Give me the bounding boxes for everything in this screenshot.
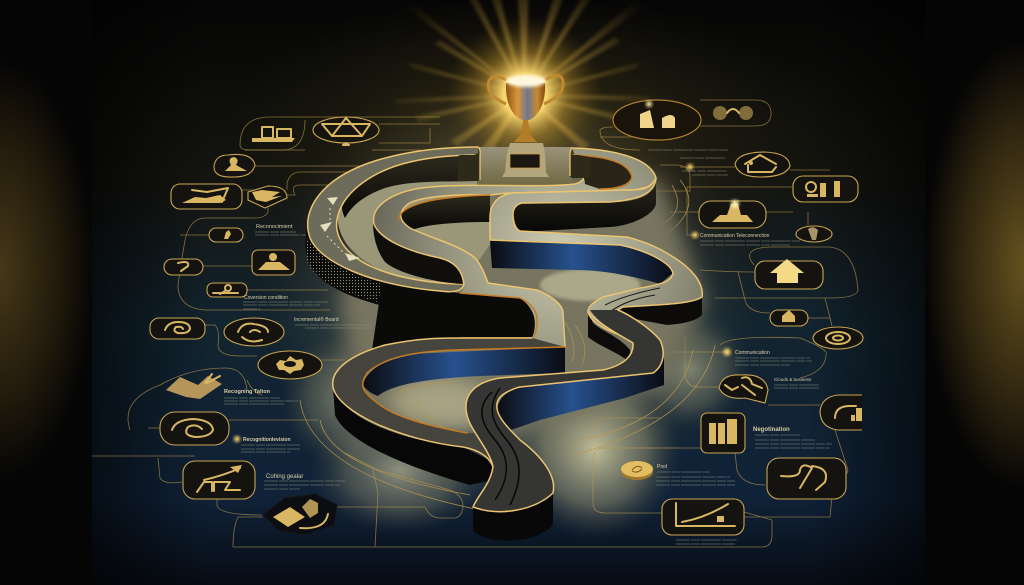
icon: swirl tile xyxy=(767,458,846,499)
icon: lit ellipse xyxy=(613,100,701,140)
label: Reconocimient: Reconocimient xyxy=(256,224,293,230)
trophy stem xyxy=(514,120,537,142)
icon: person tile xyxy=(252,250,295,275)
label: Reconocimient xyxy=(255,224,306,235)
label: Clouds and business xyxy=(774,377,820,388)
label: Recognitionlevision: Recognitionlevision xyxy=(243,437,291,443)
icon: spiral rounded tile xyxy=(150,318,205,339)
blue wall: left centre xyxy=(363,347,565,396)
crescent inner dark wall xyxy=(342,155,478,218)
road: lower dark surface xyxy=(466,310,663,512)
icon: gold mound xyxy=(248,186,287,208)
label: Pool: Pool xyxy=(657,464,667,470)
recess wall: interior near right bend xyxy=(372,293,537,350)
icon: boxes panel xyxy=(240,120,305,150)
icon: gear ellipse xyxy=(258,351,322,379)
label: Communication teleconnection: Communication Teleconnection xyxy=(700,233,770,239)
icon: handshake xyxy=(719,375,768,403)
label: Recogning Tatton: Recogning Talton xyxy=(224,389,271,395)
wall: S ribbon left bulge xyxy=(373,222,463,284)
gold edges: looping ribbon xyxy=(490,178,702,335)
trophy cup xyxy=(506,83,545,120)
icon: chart magnifier tile xyxy=(793,176,858,202)
trophy rim xyxy=(506,75,546,87)
road: lower left S surface xyxy=(333,338,565,467)
trophy rays xyxy=(395,0,652,155)
icon: graph tile xyxy=(662,499,744,535)
icon: house pill xyxy=(770,310,808,326)
label: top right text two xyxy=(682,164,728,175)
label: Negotiation: Negotination xyxy=(753,427,790,433)
label: Cohing gealar xyxy=(264,474,345,489)
central olive ground xyxy=(340,147,704,440)
wall: under left of right ribbon xyxy=(588,312,632,365)
connector lines network xyxy=(92,117,858,547)
icon: target ellipse xyxy=(813,327,863,349)
label: Communication teleconnection xyxy=(692,232,800,245)
trophy handles xyxy=(488,75,563,104)
orange inner edge: lower left S xyxy=(363,347,565,433)
icon: spiral tile xyxy=(160,412,229,445)
icon: gold boxes hexagon xyxy=(263,494,337,535)
label: Conversion condition: Coversion condition xyxy=(244,295,288,301)
gold edges: lower road xyxy=(466,310,663,512)
wall: lower S left xyxy=(333,387,493,485)
trophy plaque xyxy=(510,154,540,168)
right edge band xyxy=(925,0,1024,585)
icon: chart tile xyxy=(171,184,242,209)
label: Incremental board: Incremental® Board xyxy=(294,316,339,323)
road stripes on bend xyxy=(605,288,660,312)
icon: question ellipse xyxy=(164,259,203,275)
icon: gears pill xyxy=(700,100,771,126)
icon: pill xyxy=(209,228,243,242)
icon: arrow tile xyxy=(755,259,823,289)
inner orange edge of top right wall xyxy=(398,155,632,338)
blue wall: upper xyxy=(490,240,673,284)
wall: lower road end cap xyxy=(473,493,553,541)
icon: magnifier pill xyxy=(207,283,247,297)
crescent interior ground xyxy=(338,155,500,283)
trophy glow xyxy=(447,17,603,173)
label: bottom text xyxy=(676,540,738,544)
icon: bulb cloud xyxy=(796,226,832,242)
road stripes xyxy=(482,388,519,505)
wall end caps beside trophy xyxy=(458,147,590,181)
crescent road surface xyxy=(308,147,480,292)
label: Negotiation xyxy=(753,427,832,448)
label: Pool xyxy=(656,464,735,485)
dotted outer wall xyxy=(306,238,382,302)
wall: top right bend xyxy=(572,155,632,189)
icon: roof rounded xyxy=(735,152,790,177)
label: Cohing gealar: Cohing gealar xyxy=(266,474,303,480)
icon: triangle ellipse xyxy=(313,117,379,145)
ground gold contour rings xyxy=(300,180,715,510)
icon: person blob xyxy=(214,154,255,177)
trophy xyxy=(488,75,563,177)
wall: mid right under ribbon xyxy=(513,178,656,232)
gold edges: upper S ribbon xyxy=(374,148,656,347)
icon: small arrows on road xyxy=(320,197,360,261)
road: top right and upper S ribbon xyxy=(374,148,656,347)
label: top right text xyxy=(648,150,728,158)
label: Communication xyxy=(724,348,812,365)
icon: lighthouse tile xyxy=(699,200,766,228)
icon: bars tile xyxy=(701,413,745,453)
left edge band xyxy=(0,0,92,585)
icon: growth tile xyxy=(820,395,862,430)
gold edges: lower left S xyxy=(333,338,532,467)
icon: ornate circle xyxy=(224,318,284,346)
icon: gold coin xyxy=(621,461,653,480)
icon: growth chart tile xyxy=(183,461,255,499)
trophy plinth xyxy=(502,143,549,177)
wall: right bend end xyxy=(618,297,702,325)
road: looping lower ribbon xyxy=(490,178,702,343)
label: Recognitionlevision xyxy=(234,436,300,452)
label: Communication: Communication xyxy=(735,350,770,356)
label: Conversion condition xyxy=(243,295,328,309)
label: Clouds and business: Clouds & business xyxy=(774,377,812,382)
crescent gold edge xyxy=(308,147,478,292)
wall: upper crescent outer xyxy=(305,225,540,345)
label: Recogning Tatton xyxy=(224,389,298,404)
label: Incremental board xyxy=(294,316,372,328)
icon: open book xyxy=(166,374,222,399)
wall: centre recess xyxy=(398,195,490,230)
ground contour lines inside lower S xyxy=(395,322,585,428)
blue wall: right centre xyxy=(497,357,664,432)
